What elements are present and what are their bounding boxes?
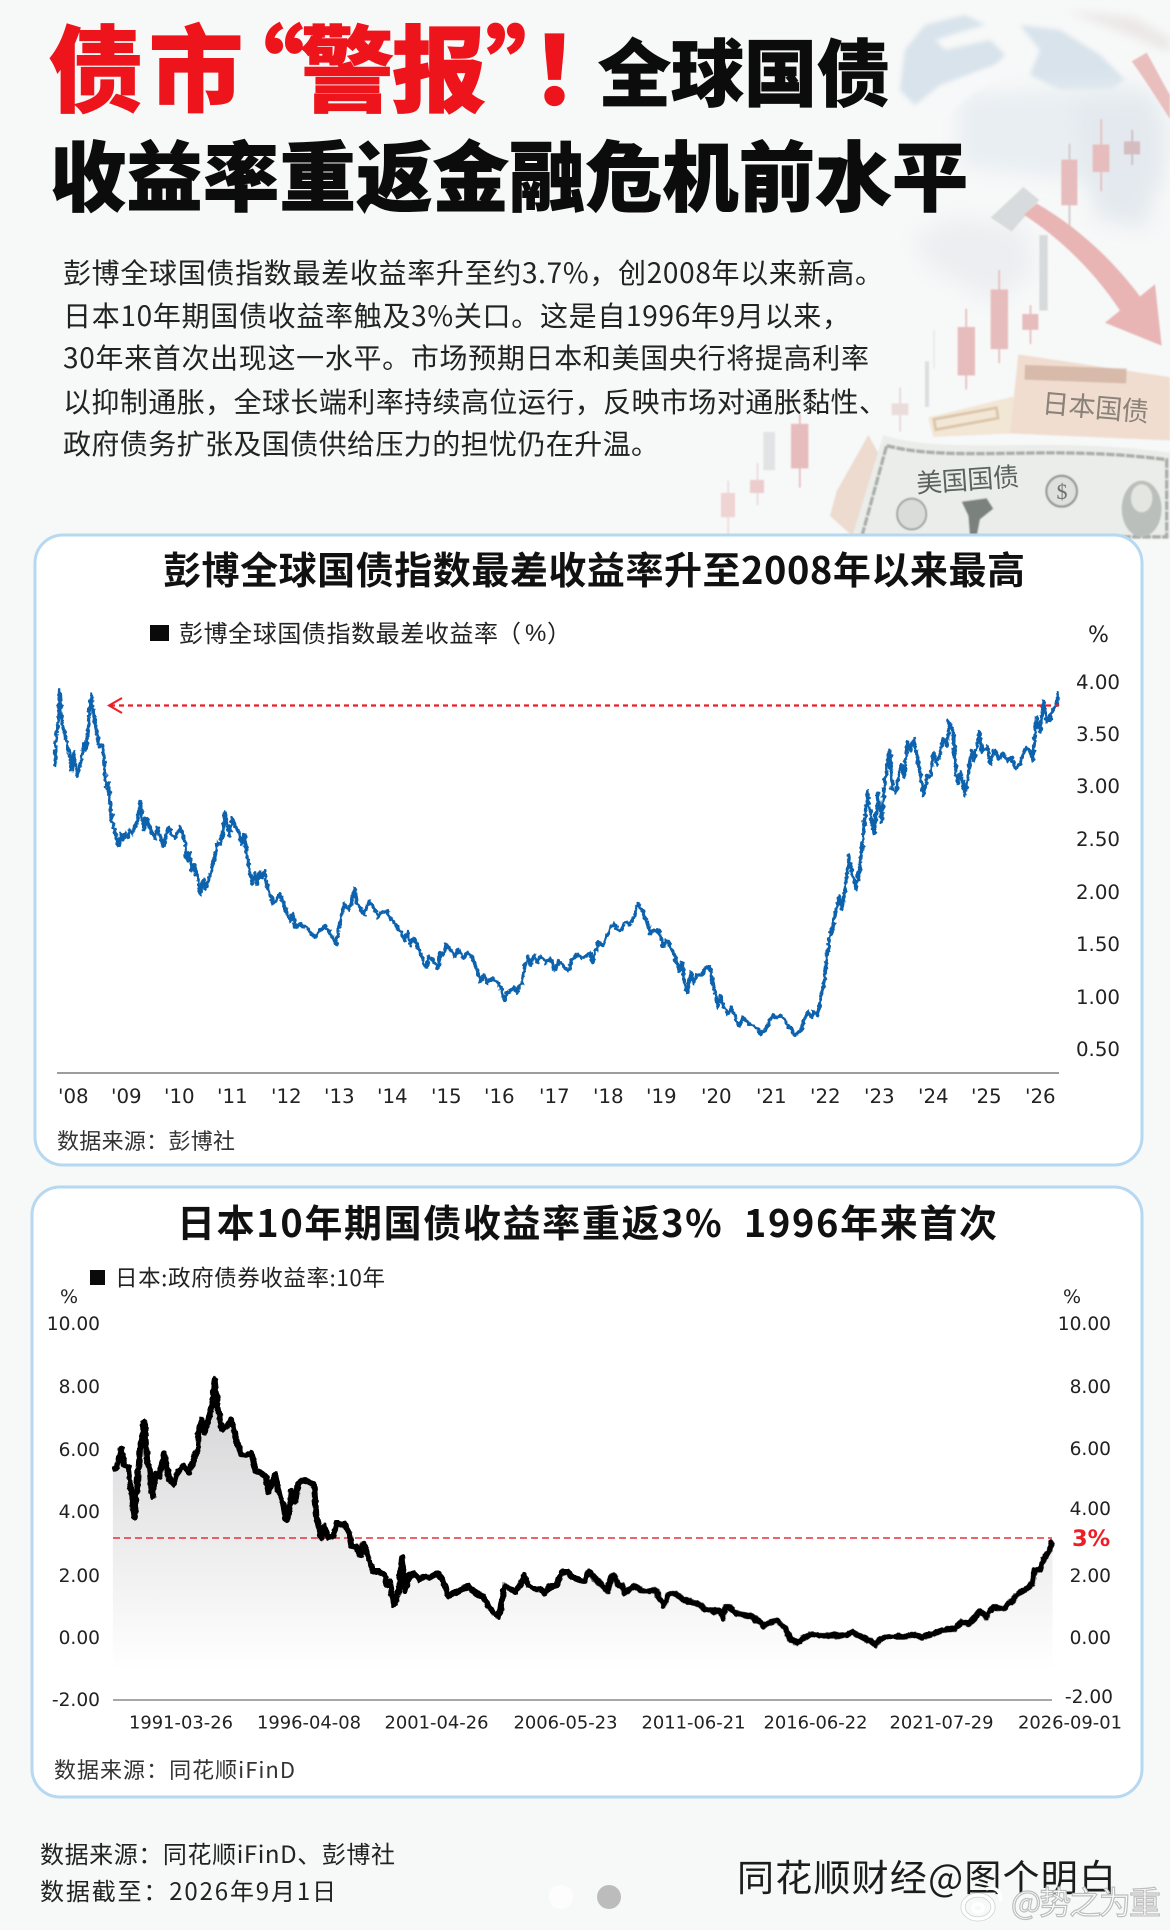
panel 1 x axis labels: '14 [377,1085,408,1108]
intro text block: 彭博全球国债指数最差收益率升至约3.7%，创2008年以来新高。 [63,252,883,292]
panel 1 x axis labels: '25 [971,1085,1002,1108]
panel 2 left y axis labels: 10.00 [47,1314,100,1335]
panel 2 left y axis labels: 0.00 [59,1628,100,1649]
title [49,0,968,227]
panel 2 x axis date labels: 1991-03-26 [129,1712,233,1734]
panel 2 left unit: % [60,1286,78,1308]
panel 2 left y axis labels [47,1314,100,1711]
intro text block: 30年来首次出现这一水平。市场预期日本和美国央行将提高利率 [63,337,869,377]
panel 2 left y axis labels: 8.00 [59,1377,100,1398]
weibo watermark [963,1878,1161,1924]
panel 1 y axis labels: 1.50 [1076,933,1120,956]
panel 2 right y axis labels: 10.00 [1058,1314,1111,1335]
panel 1 x axis labels: '21 [756,1085,787,1108]
panel 1 x axis labels: '13 [324,1085,355,1108]
panel: Bloomberg global bond index yield [35,535,1142,1165]
panel 1 legend: （ [497,614,521,649]
panel 1 y axis labels: 4.00 [1076,671,1120,694]
panel 2 x axis date labels [129,1712,1122,1734]
background illustration: globe, candlesticks, falling arrow, banknotes [721,11,1170,539]
watermark handle: @势之为重 [1011,1878,1161,1924]
panel 2 source: 数据来源：同花顺iFinD [54,1753,295,1785]
footer: data notes: 数据截至：2026年9月1日 [40,1872,336,1907]
panel 2 x axis date labels: 2001-04-26 [384,1712,488,1734]
panel 1 x axis line [57,1072,1059,1074]
panel 2 right y axis labels: 2.00 [1070,1566,1111,1587]
panel 2 x axis line [113,1699,1052,1701]
panel 1 x axis labels: '10 [164,1085,195,1108]
panel 1 x axis labels: '16 [484,1085,515,1108]
icon: weibo logo [963,1888,1000,1919]
red dashed reference arrow at 2008 high [109,698,1059,713]
intro text block [63,252,887,463]
panel 1 x axis labels: '17 [539,1085,570,1108]
panel 2 right y axis labels: 8.00 [1070,1377,1111,1398]
panel 2 left y axis labels: 4.00 [59,1502,100,1523]
panel 2 right y axis labels: 0.00 [1070,1628,1111,1649]
icon: dollar sign seal: $ [1056,479,1068,504]
panel 2 x axis date labels: 1996-04-08 [257,1712,361,1734]
panel 1 x axis labels: '11 [217,1085,248,1108]
panel 2 right y axis labels: 6.00 [1070,1439,1111,1460]
panel 2 right unit: % [1063,1286,1081,1308]
panel 1 x axis labels: '12 [271,1085,302,1108]
panel 1 line chart: worst yield [55,690,1057,1036]
panel 1 source: 数据来源：彭博社 [57,1124,235,1156]
panel 1 legend: ） [547,614,571,649]
panel 2 right y axis labels: -2.00 [1065,1687,1113,1708]
3 percent dashed reference line [113,1537,1052,1539]
panel 1 legend: % [525,620,546,647]
panel 2 x axis date labels: 2016-06-22 [764,1712,867,1734]
intro text block: 日本10年期国债收益率触及3%关口。这是自1996年9月以来， [63,295,850,335]
panel 1 x axis labels: '18 [593,1085,624,1108]
panel 1 heading: 彭博全球国债指数最差收益率升至2008年以来最高 [163,540,1025,595]
panel 2 x axis date labels: 2026-09-01 [1018,1712,1122,1734]
panel 2 legend: 日本:政府债券收益率:10年 [115,1261,385,1293]
panel 1 unit label: % [1088,623,1109,648]
panel 2 x axis date labels: 2011-06-21 [642,1712,745,1734]
panel 1 x axis labels: '09 [111,1085,142,1108]
panel 1 x axis labels: '24 [918,1085,949,1108]
panel 2 heading: 日本10年期国债收益率重返3% 1996年来首次 [177,1193,997,1248]
area fill under Japan yield [113,1380,1052,1700]
line chart: Japan 10-year yield [115,1380,1051,1645]
panel 2 x axis date labels: 2006-05-23 [514,1712,617,1734]
panel 2 left y axis labels: 2.00 [59,1566,100,1587]
brand signature: 同花顺财经@图个明白 [737,1848,1116,1902]
panel 1 legend: 彭博全球国债指数最差收益率 [179,614,498,649]
panel 1 x axis labels [58,1085,1056,1108]
panel 1 y axis labels: 1.00 [1076,986,1120,1009]
panel 2 x axis date labels: 2021-07-29 [890,1712,993,1734]
panel 1 y axis labels: 3.50 [1076,723,1120,746]
panel 1 x axis labels: '22 [810,1085,841,1108]
banknote label: Japan: 日本国债 [1041,381,1151,430]
panel 1 x axis labels: '19 [646,1085,677,1108]
intro text block: 以抑制通胀，全球长端利率持续高位运行，反映市场对通胀黏性、 [63,381,887,421]
intro text block: 政府债务扩张及国债供给压力的担忧仍在升温。 [63,423,659,463]
title line 1: red alert: 债市“警报”！ [49,0,625,132]
panel 2 right y axis labels: 4.00 [1070,1499,1111,1520]
footer: data notes [40,1835,395,1907]
banknote label: USA: 美国国债 [915,456,1020,501]
3 percent red label: 3% [1072,1526,1110,1552]
panel 1 x axis labels: '23 [864,1085,895,1108]
panel 2 left y axis labels: -2.00 [52,1690,100,1711]
panel 1 x axis labels: '15 [431,1085,462,1108]
panel 1 x axis labels: '20 [701,1085,732,1108]
panel 1 x axis labels: '08 [58,1085,89,1108]
panel 2 left y axis labels: 6.00 [59,1440,100,1461]
title line 1: black part: 全球国债 [598,16,890,122]
panel 1 y axis labels: 2.00 [1076,881,1120,904]
pagination dots [549,1885,621,1909]
panel 2 right y axis labels [1058,1314,1113,1708]
footer: data notes: 数据来源：同花顺iFinD、彭博社 [40,1835,395,1870]
title line 2: 收益率重返金融危机前水平 [50,117,968,227]
panel 1 y axis labels: 0.50 [1076,1038,1120,1061]
panel: Japan 10-year yield [32,1187,1142,1797]
panel 1 y axis labels [1076,671,1120,1061]
panel 1 x axis labels: '26 [1025,1085,1056,1108]
panel 1 y axis labels: 2.50 [1076,828,1120,851]
panel 1 y axis labels: 3.00 [1076,775,1120,798]
